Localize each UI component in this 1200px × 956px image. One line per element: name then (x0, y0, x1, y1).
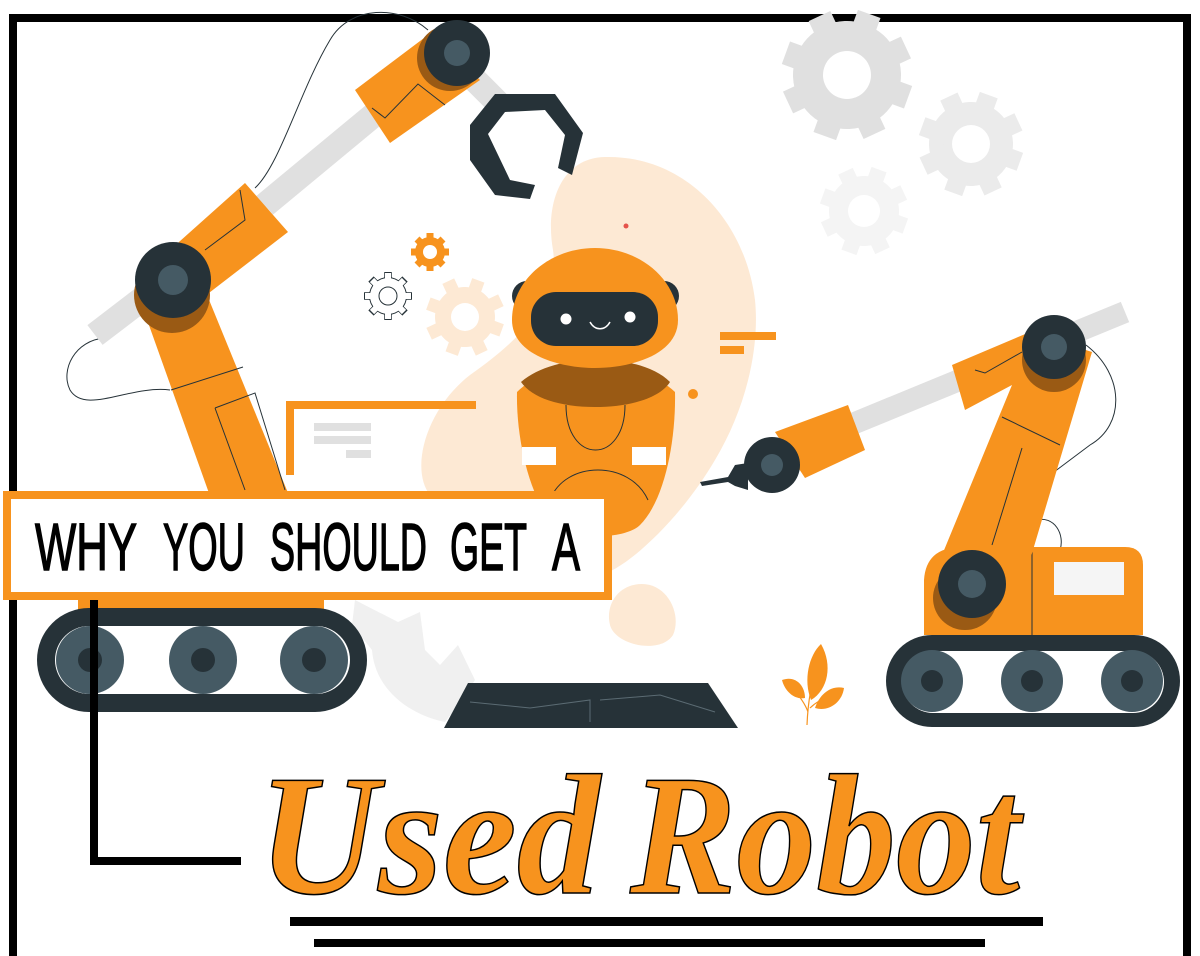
heading: why you should get a: WHY (35, 510, 137, 585)
title: used robot: Used (258, 741, 603, 931)
left track (37, 608, 367, 712)
robot visor (531, 292, 658, 346)
left robot arm (67, 12, 583, 510)
grey arm rods (95, 55, 505, 335)
thin cable (67, 12, 428, 400)
heading: why you should get a: A (552, 510, 580, 585)
icon: outline gear (364, 272, 412, 320)
small gears (364, 233, 515, 367)
claw (470, 94, 583, 199)
icon: leaf plant grey (352, 600, 475, 722)
icon: peach gear (415, 267, 515, 367)
heading: why you should get a: GET (450, 510, 527, 585)
title: used robot: Robot (629, 741, 1025, 931)
thin cable (1035, 345, 1116, 550)
tool tip (700, 463, 748, 490)
orange main arm (140, 290, 295, 510)
icon: orange plant (782, 644, 844, 725)
robot ears (512, 281, 542, 311)
right robot (700, 312, 1180, 727)
joints (1022, 328, 1086, 392)
heading: why you should get a: SHOULD (270, 510, 427, 585)
robot base body (924, 547, 1143, 635)
icon: large grey gears (764, 0, 1038, 267)
robot body (517, 366, 675, 536)
orange forearm (170, 183, 288, 296)
heading box (7, 495, 608, 596)
icon: orange gear (411, 233, 449, 271)
orange upper segment (355, 32, 480, 143)
orange forearm (775, 405, 865, 478)
black connector line (94, 600, 241, 861)
heading: why you should get a (35, 510, 580, 585)
decorative dash marks (624, 224, 776, 399)
right track (886, 635, 1180, 727)
heading: why you should get a: YOU (163, 510, 245, 585)
top joint (417, 25, 483, 91)
grey arm rod (850, 312, 1125, 425)
main arm (940, 332, 1092, 560)
central robot (512, 248, 679, 536)
peach small blob (609, 584, 676, 646)
screen bracket with text lines (290, 405, 476, 475)
title underlines (290, 917, 1043, 947)
left robot base (37, 590, 367, 712)
robot head (512, 248, 678, 368)
elbow joint (134, 257, 210, 333)
dark floor plate (444, 683, 738, 728)
peach background blob (421, 157, 756, 575)
title: used robot (258, 741, 1025, 931)
